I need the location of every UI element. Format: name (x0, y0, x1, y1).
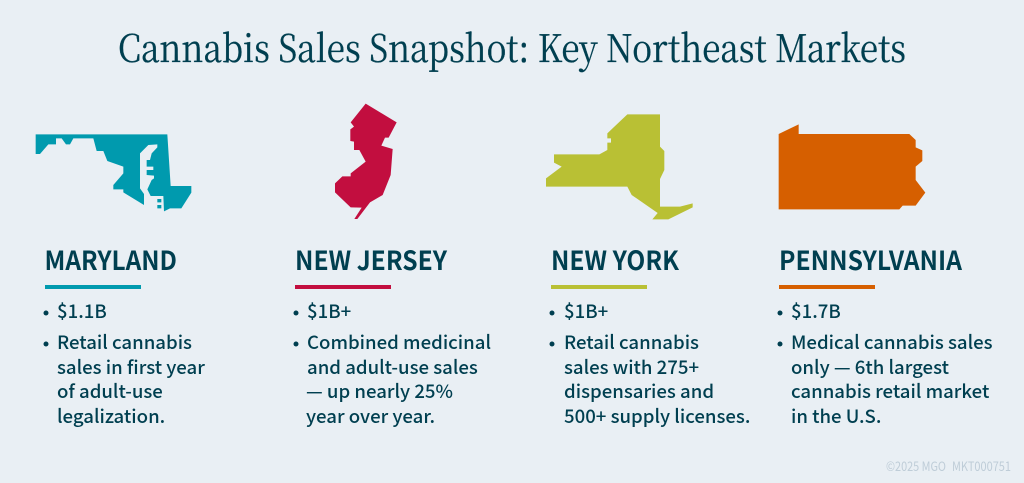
text block: Pennsylvania facts (778, 297, 993, 429)
text block: New York facts: sales with 275+ (564, 353, 699, 380)
text block: Pennsylvania facts: in the U.S. (791, 402, 881, 429)
text block: Maryland facts (44, 297, 205, 429)
panel: Pennsylvania (778, 124, 993, 429)
title: Cannabis Sales Snapshot: Key Northeast Markets (118, 18, 906, 73)
text block: Pennsylvania facts: only — 6th largest (791, 353, 950, 380)
copyright note: MKT000751 (952, 456, 1011, 475)
text block: New Jersey facts: Combined medicinal (307, 328, 491, 355)
heading: New York: NEW YORK (551, 239, 680, 278)
heading: New Jersey: NEW JERSEY (295, 239, 448, 278)
text block: New York facts (550, 297, 750, 429)
panel: New Jersey (294, 104, 491, 429)
heading: Maryland: MARYLAND (44, 239, 177, 278)
icon: Pennsylvania map (779, 124, 925, 209)
icon: New Jersey map (335, 104, 397, 219)
text block: New Jersey facts: year over year. (306, 402, 435, 429)
accent rule: Maryland (45, 285, 141, 289)
icon: New York map (546, 114, 693, 219)
heading: Pennsylvania: PENNSYLVANIA (779, 239, 963, 278)
text block: New Jersey facts: — up nearly 25% (306, 377, 453, 404)
text block: Maryland facts: Retail cannabis (57, 328, 192, 355)
text block: Maryland facts: sales in first year (57, 353, 205, 380)
text block: New Jersey facts: $1B+ (307, 297, 351, 324)
panel: Maryland (36, 134, 205, 429)
accent rule: New Jersey (295, 285, 391, 289)
text block: New York facts: Retail cannabis (564, 328, 699, 355)
text block: New Jersey facts: and adult-use sales (307, 353, 478, 380)
text block: Maryland facts: legalization. (57, 402, 165, 429)
text block: Maryland facts: $1.1B (57, 297, 107, 324)
accent rule: Pennsylvania (779, 285, 875, 289)
text block: New York facts: 500+ supply licenses. (564, 402, 750, 429)
text block: New York facts: $1B+ (564, 297, 608, 324)
accent rule: New York (551, 285, 647, 289)
text block: Maryland facts: of adult-use (57, 377, 163, 404)
text block: Pennsylvania facts: cannabis retail market (791, 377, 990, 404)
text block: New York facts: dispensaries and (564, 377, 714, 404)
text block: Pennsylvania facts: $1.7B (791, 297, 841, 324)
text block: New Jersey facts (294, 297, 491, 429)
text block: Pennsylvania facts: Medical cannabis sales (791, 328, 993, 355)
icon: Maryland map (36, 134, 191, 211)
copyright note: ©2025 MGO (886, 456, 946, 475)
copyright note (886, 456, 1011, 475)
panel: New York (546, 114, 750, 429)
